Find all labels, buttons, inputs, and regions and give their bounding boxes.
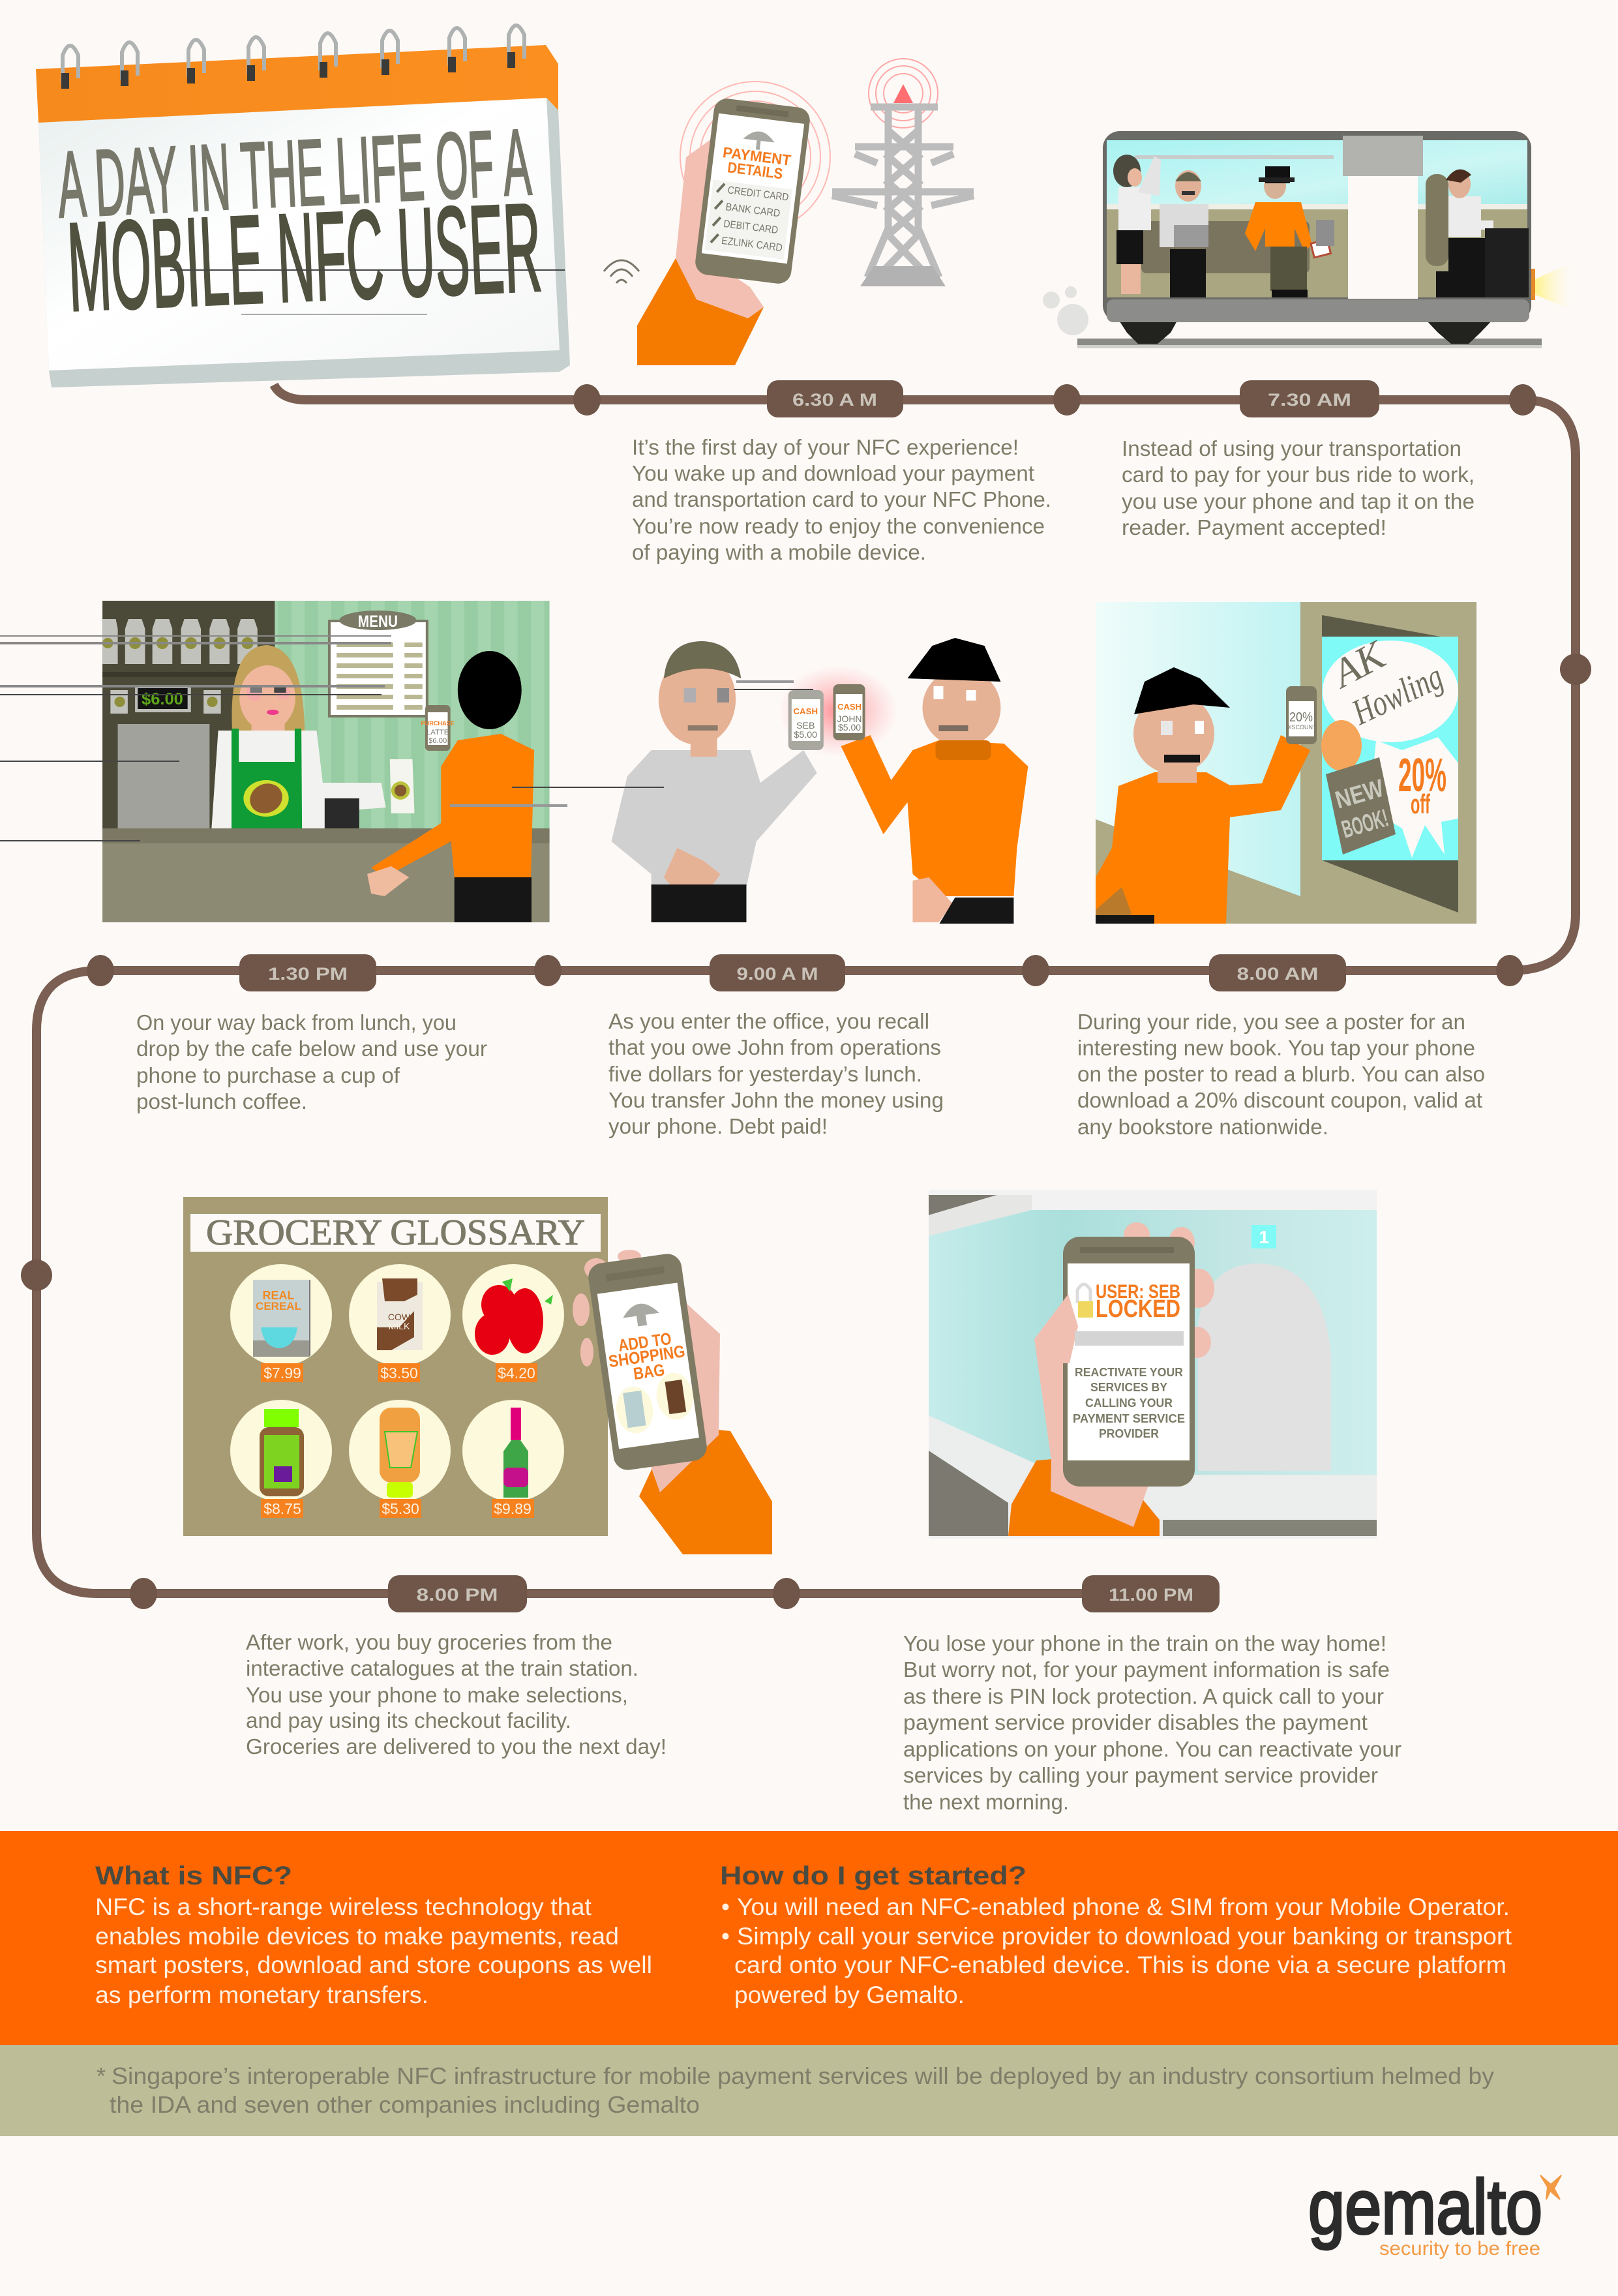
dark corners xyxy=(929,1451,1008,1536)
new book tag: BOOK! xyxy=(1339,804,1392,844)
calendar page xyxy=(38,98,570,387)
phone: LOCKED xyxy=(1096,1295,1180,1323)
heading: what is NFC: What is NFC? xyxy=(95,1862,292,1890)
colleague phone xyxy=(788,690,824,750)
illustration: transmission tower xyxy=(832,59,974,286)
customer xyxy=(367,651,534,922)
text: how do I get started: Simply call your service provider to download your banking or transport xyxy=(737,1923,1512,1950)
milk carton xyxy=(377,1278,423,1350)
colleague phone: CASH xyxy=(793,706,818,716)
text: 8:00 AM: on the poster to read a blurb. You can also xyxy=(1077,1062,1485,1086)
text: 6:30 AM xyxy=(632,435,1051,564)
text: 7:30 AM: card to pay for your bus ride to work, xyxy=(1122,462,1475,487)
seat bench xyxy=(1141,221,1310,273)
text: 11:00 PM xyxy=(903,1631,1401,1814)
poster script: AK xyxy=(1323,631,1394,697)
time pill 7:30 AM: 7.30 AM xyxy=(1268,390,1351,410)
customer phone: PURCHASE xyxy=(421,720,455,727)
colleague xyxy=(611,641,817,922)
text: 1:30 PM: drop by the cafe below and use your xyxy=(136,1036,487,1061)
thumb xyxy=(1034,1294,1078,1363)
text: 11:00 PM: services by calling your payment service provider xyxy=(903,1763,1378,1787)
sleeve xyxy=(1008,1459,1160,1536)
sign icon: 1 xyxy=(1259,1227,1269,1247)
text: 6:30 AM: and transportation card to your NFC Phone. xyxy=(632,487,1051,511)
text: 8:00 PM: Groceries are delivered to you the next day! xyxy=(246,1734,667,1759)
price tags: $5.30 xyxy=(382,1500,419,1517)
phone: CREDIT CARD xyxy=(727,185,789,204)
poster script xyxy=(1323,631,1449,733)
text: 6:30 AM: You wake up and download your payment xyxy=(632,461,1034,485)
colleague phone: $5.00 xyxy=(794,729,817,740)
poster shadows xyxy=(1322,615,1441,637)
text: 6:30 AM: You’re now ready to enjoy the convenience xyxy=(632,514,1045,538)
text: 11:00 PM: payment service provider disables the payment xyxy=(903,1710,1368,1734)
body shell xyxy=(1103,131,1531,322)
text: 8:00 PM: and pay using its checkout facility. xyxy=(246,1708,571,1732)
cereal box: REAL xyxy=(262,1289,295,1302)
price tags: $4.20 xyxy=(498,1365,535,1382)
text: 7:30 AM xyxy=(1122,436,1475,539)
text: 1:30 PM: On your way back from lunch, you xyxy=(136,1010,457,1035)
text: 9:00 AM: your phone. Debt paid! xyxy=(608,1114,828,1138)
panel: grocery glossary: GROCERY GLOSSARY xyxy=(206,1213,585,1253)
user in orange xyxy=(1096,667,1310,924)
starburst xyxy=(1370,737,1458,858)
time pill 1:30 PM: 1.30 PM xyxy=(268,964,348,984)
phone: EZLINK CARD xyxy=(721,235,783,254)
wheels xyxy=(1118,320,1493,344)
apples xyxy=(475,1278,553,1355)
price tags: $3.50 xyxy=(380,1365,418,1382)
panel: cafe: $6.00 xyxy=(142,690,183,708)
arch xyxy=(1198,1263,1331,1471)
time pill 9:00 AM xyxy=(710,954,845,991)
product circles xyxy=(230,1264,564,1502)
phone: DETAILS xyxy=(727,159,784,182)
time pill 8:00 PM: 8.00 PM xyxy=(416,1585,498,1605)
user phone xyxy=(1286,686,1317,744)
text: how do I get started: You will need an NFC-enabled phone & SIM from your Mobile Operator. xyxy=(737,1894,1510,1920)
footnote text: * xyxy=(97,2062,106,2089)
phone: SERVICES BY xyxy=(1090,1381,1167,1394)
phone: BANK CARD xyxy=(725,202,781,219)
calendar with title xyxy=(36,25,570,387)
text: 9:00 AM xyxy=(608,1009,944,1138)
text: 11:00 PM: as there is PIN lock protection. A quick call to your xyxy=(903,1684,1384,1708)
hand xyxy=(676,137,764,318)
price tags xyxy=(261,1363,537,1518)
text: 6:30 AM: It’s the first day of your NFC experience! xyxy=(632,435,1019,459)
new book tag xyxy=(1326,757,1396,854)
heading: how do I get started: How do I get started? xyxy=(720,1862,1026,1890)
banner xyxy=(190,1214,601,1252)
user phone xyxy=(833,684,865,740)
hand xyxy=(1034,1294,1148,1527)
text: 9:00 AM: You transfer John the money using xyxy=(608,1088,944,1112)
customer phone xyxy=(421,705,455,751)
text: how do I get started xyxy=(721,1894,1512,2008)
text: what is NFC: smart posters, download and store coupons as well xyxy=(95,1952,652,1978)
wine bottle xyxy=(503,1408,528,1498)
text: 8:00 PM: You use your phone to make selections, xyxy=(246,1683,628,1707)
text: 11:00 PM: the next morning. xyxy=(903,1790,1069,1814)
nfc waves xyxy=(604,260,639,283)
phone xyxy=(1034,1237,1195,1487)
seal xyxy=(1321,720,1362,771)
colleague phone: SEB xyxy=(796,720,815,731)
time pill 8:00 AM xyxy=(1209,954,1346,991)
text: 7:30 AM: reader. Payment accepted! xyxy=(1122,515,1386,539)
text: 11:00 PM: applications on your phone. You can reactivate your xyxy=(903,1737,1401,1761)
time pill 8:00 PM xyxy=(388,1575,527,1612)
title xyxy=(55,110,544,337)
user phone: DISCOUNT xyxy=(1286,724,1317,731)
phone: USER: SEB xyxy=(1096,1281,1180,1303)
time pill 1:30 PM xyxy=(239,954,376,991)
sauce jar xyxy=(260,1409,304,1496)
price tags: $9.89 xyxy=(494,1500,532,1517)
text: how do I get started: • xyxy=(721,1894,730,1920)
door xyxy=(1348,136,1418,299)
text: 9:00 AM: that you owe John from operations xyxy=(608,1035,941,1059)
time pill 9:00 AM: 9.00 A M xyxy=(737,964,818,984)
price tags: $7.99 xyxy=(263,1365,301,1382)
timeline nodes row 1 xyxy=(573,384,1591,685)
panel: what is NFC band xyxy=(0,1831,1618,2045)
sleeve xyxy=(637,258,764,365)
text: 8:00 AM: During your ride, you see a poster for an xyxy=(1077,1010,1465,1034)
poster xyxy=(1322,637,1458,860)
panel: cafe: MENU xyxy=(358,612,398,631)
cereal box xyxy=(253,1280,310,1357)
new book tag: NEW xyxy=(1332,775,1387,815)
time pill 7:30 AM xyxy=(1240,380,1379,417)
time pill 8:00 AM: 8.00 AM xyxy=(1236,964,1319,984)
text: A DAY IN THE LIFE OF A xyxy=(55,110,533,237)
phone: CALLING YOUR xyxy=(1085,1397,1173,1410)
phone: PAYMENT xyxy=(722,144,792,169)
phone: SHOPPING xyxy=(607,1341,686,1371)
text: 8:00 PM: After work, you buy groceries from the xyxy=(246,1630,612,1654)
text: 11:00 PM: You lose your phone in the train on the way home! xyxy=(903,1631,1386,1655)
panel: colleague transfer xyxy=(611,638,1028,924)
text: what is NFC xyxy=(95,1894,652,2008)
floor xyxy=(929,1415,1377,1536)
sleeve xyxy=(639,1430,772,1554)
text: 7:30 AM: you use your phone and tap it on the xyxy=(1122,489,1475,513)
lock xyxy=(1077,1284,1093,1318)
cereal box: CEREAL xyxy=(256,1300,301,1312)
time pill 6:30 AM xyxy=(767,380,903,417)
headlight xyxy=(1533,262,1572,310)
handrail xyxy=(1135,155,1334,159)
text: 8:00 AM xyxy=(1077,1010,1485,1139)
time pill 6:30 AM: 6.30 A M xyxy=(792,390,877,410)
glow xyxy=(778,665,898,757)
panel: footnote band xyxy=(0,2045,1618,2136)
panel: grocery glossary xyxy=(183,1197,608,1536)
panel: book poster xyxy=(1096,602,1476,924)
poster script: Howling xyxy=(1346,656,1449,733)
text: 1:30 PM: phone to purchase a cup of xyxy=(136,1063,400,1087)
phone: PROVIDER xyxy=(1099,1427,1159,1440)
time pill 11:00 PM: 11.00 PM xyxy=(1109,1585,1193,1605)
card reader xyxy=(325,798,359,828)
phone xyxy=(694,97,811,285)
milk carton: MILK xyxy=(389,1321,410,1331)
text: 6:30 AM: of paying with a mobile device. xyxy=(632,540,926,564)
illustration: bus ride xyxy=(1043,131,1572,348)
panel: lost phone xyxy=(929,1190,1377,1539)
passenger: man with moustache xyxy=(1160,170,1208,297)
rail xyxy=(1077,339,1542,348)
text: 8:00 AM: download a 20% discount coupon, valid at xyxy=(1077,1088,1482,1112)
illustration: phone showing payment details xyxy=(604,82,830,365)
illustration: shopping phone xyxy=(573,1250,772,1554)
text: 8:00 AM: interesting new book. You tap your phone xyxy=(1077,1036,1475,1060)
logo star xyxy=(1540,2175,1561,2199)
user in orange xyxy=(841,638,1028,924)
user phone: CASH xyxy=(837,702,861,712)
wall xyxy=(929,1210,1377,1475)
menu board xyxy=(329,621,427,716)
passenger: user in orange xyxy=(1245,166,1334,297)
text: how do I get started: powered by Gemalto. xyxy=(734,1982,965,2008)
coffee cup xyxy=(390,759,415,813)
text: what is NFC: NFC is a short-range wireless technology that xyxy=(95,1894,592,1920)
text: 7:30 AM: Instead of using your transportation xyxy=(1122,436,1461,461)
text: 11:00 PM: But worry not, for your payment information is safe xyxy=(903,1657,1390,1682)
text: what is NFC: as perform monetary transfers. xyxy=(95,1982,428,2008)
user phone: $5.00 xyxy=(838,722,861,733)
logo: gemalto: gemalto xyxy=(1308,2164,1542,2250)
exhaust xyxy=(1043,286,1088,335)
price tags: $8.75 xyxy=(263,1500,301,1517)
phone: PAYMENT SERVICE xyxy=(1073,1412,1185,1425)
milk carton: COW xyxy=(388,1312,411,1322)
user phone: 20% xyxy=(1289,710,1313,725)
counter xyxy=(102,828,550,922)
bottom strip xyxy=(1163,1520,1377,1536)
time pill 11:00 PM xyxy=(1082,1575,1220,1612)
text: 8:00 PM xyxy=(246,1630,667,1759)
footnote text: the IDA and seven other companies including Gemalto xyxy=(110,2091,700,2118)
tagline: security to be free xyxy=(1379,2238,1540,2259)
sign icon xyxy=(1251,1225,1276,1248)
panel: book poster: off xyxy=(1411,789,1431,819)
user phone: JOHN xyxy=(837,714,862,724)
calendar header xyxy=(36,45,558,123)
calendar rings xyxy=(61,25,524,89)
driver xyxy=(1426,170,1529,297)
cash register xyxy=(118,724,209,828)
text: MOBILE NFC USER xyxy=(65,177,544,337)
hand xyxy=(573,1250,720,1492)
text: 1:30 PM xyxy=(136,1010,487,1113)
back shelf xyxy=(102,601,275,829)
text: what is NFC: enables mobile devices to make payments, read xyxy=(95,1923,619,1950)
timeline nodes row 2 xyxy=(21,955,1523,1291)
window xyxy=(1096,602,1300,896)
tower frame xyxy=(832,107,974,277)
cups on shelf xyxy=(102,619,258,714)
phone: REACTIVATE YOUR xyxy=(1075,1366,1183,1379)
ketchup bottle xyxy=(380,1408,420,1498)
footnote text: Singapore’s interoperable NFC infrastructure for mobile payment services will be deployed by an industry consortium helmed by xyxy=(112,2062,1494,2089)
timeline path xyxy=(37,385,1576,1594)
text: 9:00 AM: five dollars for yesterday’s lunch. xyxy=(608,1062,922,1086)
panel: cafe xyxy=(102,601,550,922)
text: 1:30 PM: post-lunch coffee. xyxy=(136,1089,307,1113)
customer phone: $6.00 xyxy=(428,737,447,745)
barista xyxy=(211,645,386,828)
signal rings xyxy=(680,82,830,232)
customer phone: LATTE xyxy=(427,729,449,736)
discount: 20% xyxy=(1398,749,1446,802)
footnote text xyxy=(97,2062,1494,2118)
phone: ADD TO xyxy=(617,1329,672,1355)
tower signal xyxy=(869,59,938,128)
timeline nodes row 3 xyxy=(130,1578,800,1609)
text: how do I get started: • xyxy=(721,1923,730,1950)
phone: DEBIT CARD xyxy=(723,219,779,236)
text: how do I get started: card onto your NFC-enabled device. This is done via a secure platform xyxy=(734,1952,1506,1978)
phone: BAG xyxy=(632,1360,666,1383)
passenger: woman xyxy=(1113,155,1161,294)
wall stripes xyxy=(102,601,550,922)
phone xyxy=(586,1252,709,1472)
text: 8:00 AM: any bookstore nationwide. xyxy=(1077,1115,1328,1139)
text: 8:00 PM: interactive catalogues at the train station. xyxy=(246,1656,638,1680)
text: 9:00 AM: As you enter the office, you recall xyxy=(608,1009,929,1033)
